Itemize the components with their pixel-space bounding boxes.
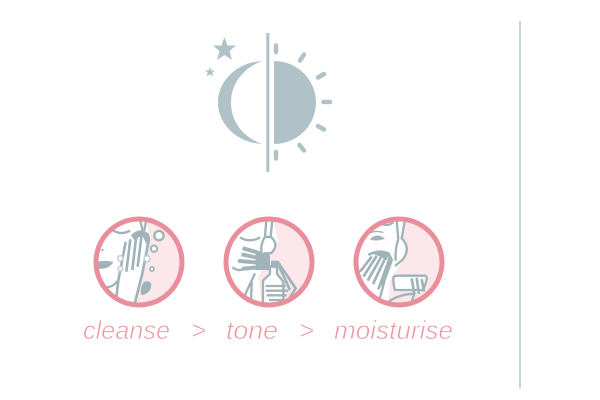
divider <box>266 33 269 172</box>
arrow: greater than: > <box>191 315 206 345</box>
face lines <box>379 220 407 302</box>
step: moisturise: moisturise <box>334 315 453 345</box>
ring <box>226 219 312 305</box>
ring <box>96 219 182 305</box>
icon: moisturise <box>356 217 445 307</box>
foam on hand <box>131 230 150 245</box>
pink half background <box>388 222 440 302</box>
sun rays <box>276 46 330 158</box>
fingers <box>116 235 149 303</box>
icon: large star <box>213 37 236 60</box>
mouth <box>97 261 113 269</box>
icon: cleanse <box>96 217 185 307</box>
fingers on face <box>360 252 392 289</box>
pink half background <box>258 222 310 302</box>
vertical rule <box>519 21 521 388</box>
captions <box>83 315 453 345</box>
bottle <box>263 267 283 305</box>
palm <box>256 251 270 270</box>
icon: day and night <box>205 33 330 172</box>
hair and brow lines <box>102 219 146 251</box>
icon: half sun <box>274 61 316 144</box>
icon: tone <box>226 217 315 307</box>
icon: moon <box>218 61 262 144</box>
bubbles <box>118 231 164 271</box>
spraying fingers <box>240 249 258 269</box>
step: cleanse: cleanse <box>83 315 170 345</box>
jaw line <box>106 280 118 287</box>
white hand <box>113 233 148 305</box>
face lines <box>232 220 275 305</box>
pink half background <box>136 222 180 302</box>
holding hand <box>412 278 424 294</box>
holding hand <box>278 262 296 303</box>
eye <box>370 235 385 241</box>
foam patch <box>141 281 151 295</box>
step: tone: tone <box>226 315 278 345</box>
icon: small star <box>205 67 215 76</box>
ring <box>356 219 442 305</box>
arrow: greater than: > <box>299 315 314 345</box>
jar <box>393 276 427 290</box>
